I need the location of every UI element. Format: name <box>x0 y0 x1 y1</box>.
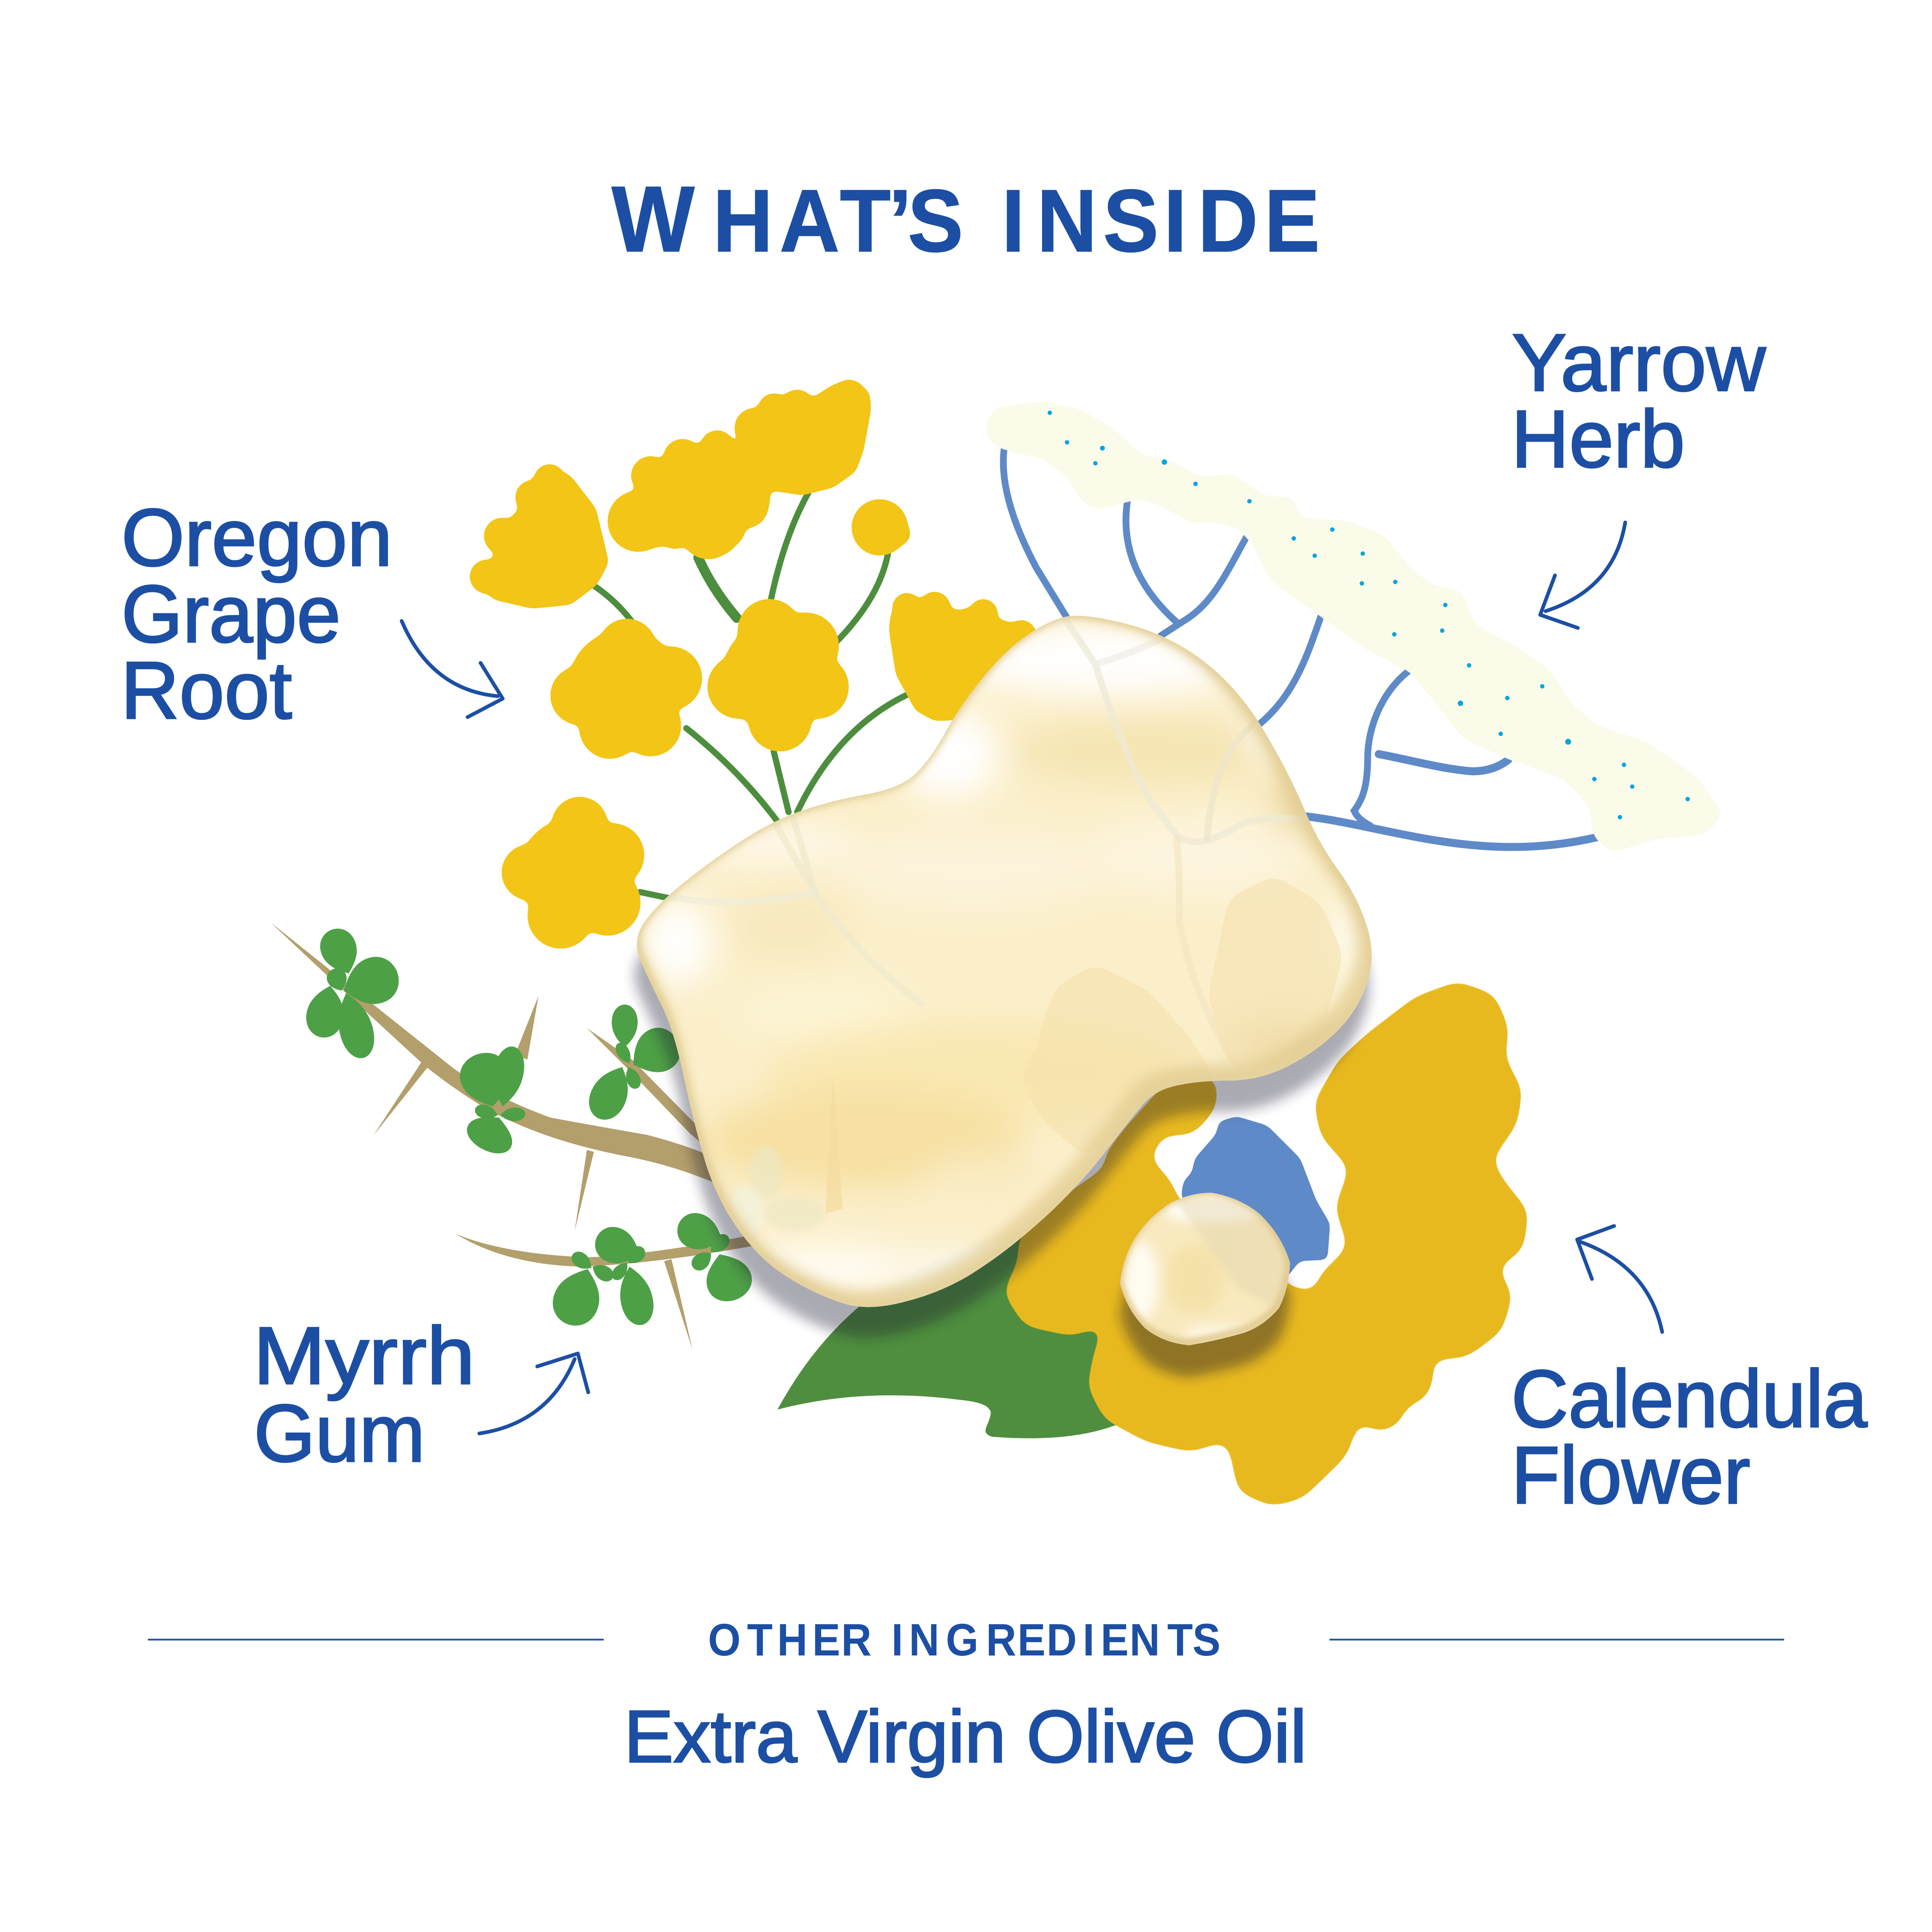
label: Myrrh Gum <box>253 1310 475 1479</box>
big oil drop <box>631 608 1372 1331</box>
small oil drop <box>1119 1190 1294 1346</box>
label: Yarrow Herb <box>1511 317 1766 484</box>
icon: myrrh leaves <box>303 923 757 1332</box>
other ingredients value: Extra Virgin Olive Oil <box>624 1695 1307 1778</box>
flower: round left <box>550 619 702 759</box>
arrow: Calendula Flower <box>1577 1226 1662 1332</box>
yarrow dots <box>1047 410 1690 819</box>
title: W HAT’S INSIDE <box>611 166 1320 271</box>
small oil drop shadow <box>1120 1225 1290 1377</box>
icon: calendula flower <box>1007 985 1525 1503</box>
flower: small bud <box>852 499 911 556</box>
icon: myrrh branches <box>271 923 754 1350</box>
flower: left tulip <box>469 464 605 605</box>
big oil drop shadow <box>635 646 1369 1338</box>
icon: calendula blue centre <box>1183 1118 1328 1281</box>
arrow: Myrrh Gum <box>479 1354 588 1433</box>
label: Calendula Flower <box>1511 1353 1868 1520</box>
label: Oregon Grape Root <box>121 492 392 735</box>
illustration: oregon grape stems <box>592 493 909 899</box>
flower: right tulip <box>892 592 1047 718</box>
other ingredients heading: OTHER INGREDIENTS <box>708 1614 1221 1665</box>
label: Oregon Grape Root: Root <box>121 645 292 735</box>
label: Myrrh Gum: Myrrh <box>253 1310 475 1401</box>
label: Calendula Flower: Flower <box>1511 1430 1750 1520</box>
flower: top cluster <box>608 380 868 559</box>
label: Oregon Grape Root: Grape <box>121 568 341 659</box>
arrow: Yarrow Herb <box>1540 522 1625 628</box>
icon: big green leaf <box>777 1232 1134 1438</box>
label: Oregon Grape Root: Oregon <box>121 492 392 583</box>
label: Myrrh Gum: Gum <box>254 1388 425 1479</box>
label: Calendula Flower: Calendula <box>1511 1353 1868 1444</box>
label: Yarrow Herb: Yarrow <box>1512 317 1766 408</box>
arrow: Oregon Grape Root <box>402 621 503 717</box>
icon: yarrow flower head <box>988 405 1719 849</box>
label: Yarrow Herb: Herb <box>1511 393 1685 484</box>
icon: oregon grape flowers <box>469 380 1047 949</box>
ghost shapes seen through oil <box>672 620 1308 1069</box>
flower: round lower <box>502 797 644 949</box>
illustration: yarrow stems <box>1003 448 1597 847</box>
flower: round centre <box>707 599 849 752</box>
